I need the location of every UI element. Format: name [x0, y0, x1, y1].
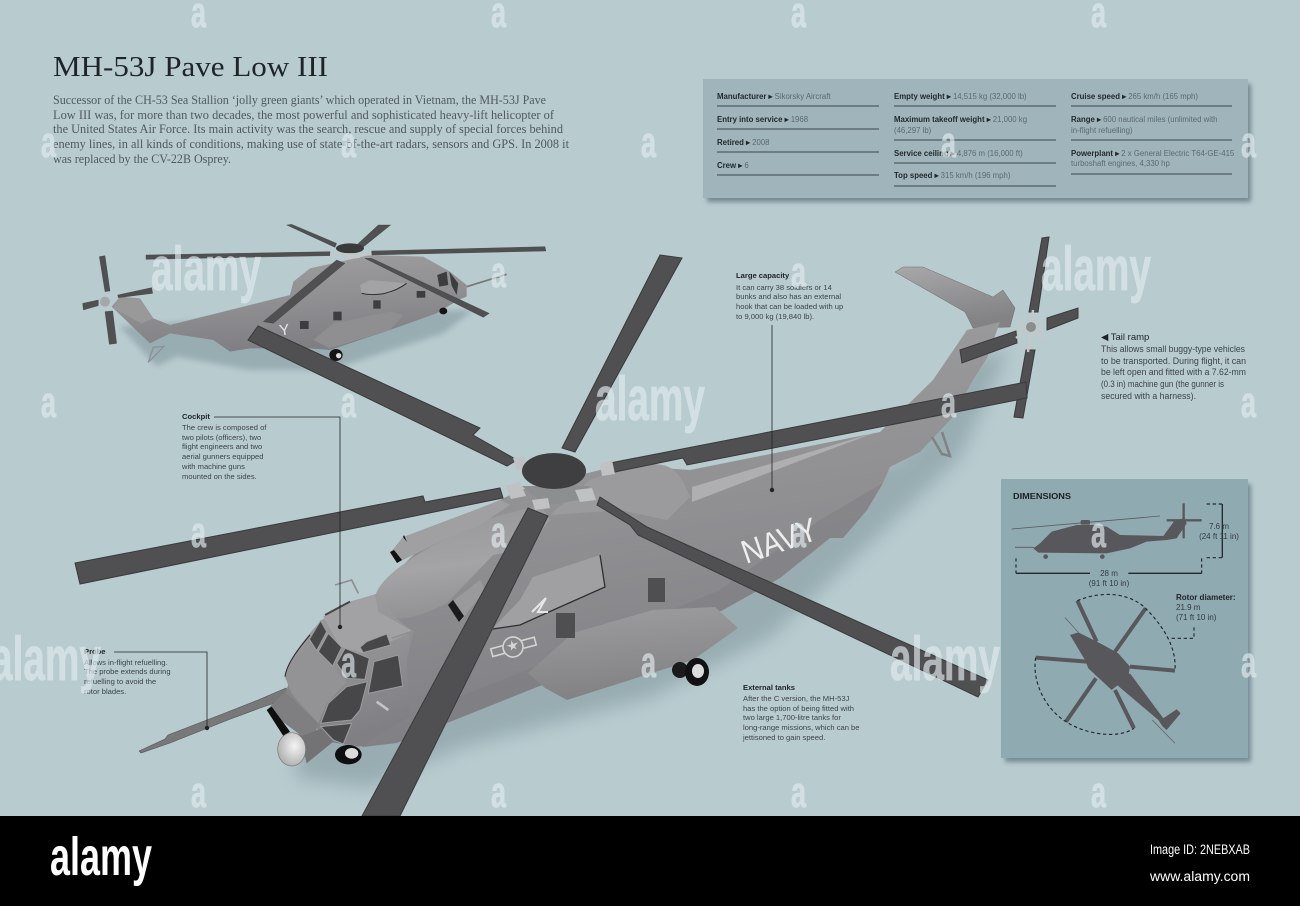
callout: cockpit: aerial gunners equipped	[182, 452, 264, 461]
callout: large capacity: to 9,000 kg (19,840 lb).	[736, 312, 814, 321]
panel: specifications: Cruise speed ▸ 265 km/h (165 mph)	[1071, 92, 1198, 101]
external tank	[528, 607, 738, 700]
callout: external tanks: After the C version, the MH-53J	[743, 694, 850, 703]
dimension labels: (24 ft 11 in)	[1199, 532, 1239, 541]
small helicopter, three-quarter rear view: Y	[278, 321, 291, 340]
callout: tail ramp	[1101, 332, 1246, 401]
panel: dimensions	[1001, 479, 1251, 762]
stock photo watermarks: a	[941, 378, 956, 427]
dimension labels: (71 ft 10 in)	[1176, 613, 1217, 622]
stock photo watermarks: a	[791, 508, 806, 557]
callout: probe: Probe	[84, 647, 106, 656]
callout: cockpit	[181, 412, 342, 629]
callout: tail ramp: secured with a harness).	[1101, 391, 1196, 401]
stock photo watermarks: a	[491, 248, 506, 297]
stock photo watermarks: alamy	[151, 235, 261, 304]
stock photo watermarks: a	[491, 768, 506, 817]
callout: cockpit: Cockpit	[182, 412, 210, 421]
callout: external tanks: External tanks	[743, 683, 795, 692]
callout: tail ramp: ◀ Tail ramp	[1101, 332, 1149, 343]
stock photo watermarks: a	[641, 118, 656, 167]
callout: large capacity: hook that can be loaded with up	[736, 302, 843, 311]
top view silhouette	[1036, 601, 1181, 743]
stock photo watermarks: a	[791, 768, 806, 817]
callout: external tanks: jettisoned to gain speed.	[742, 733, 825, 742]
air duct strip	[692, 432, 877, 502]
callout: probe: refuelling to avoid the	[84, 677, 156, 686]
panel: specifications: Entry into service ▸ 1968	[717, 115, 808, 124]
callout: external tanks: two large 1,700-litre tanks for	[743, 713, 841, 722]
rotor hub	[505, 453, 615, 510]
dimension labels: Rotor diameter:	[1176, 593, 1236, 602]
panel: specifications: Manufacturer ▸ Sikorsky Aircraft	[717, 92, 831, 101]
forward engine fairing	[375, 505, 550, 618]
callout: cockpit: The crew is composed of	[182, 423, 267, 432]
panel: specifications: Empty weight ▸ 14,515 kg (32,000 lb)	[894, 92, 1027, 101]
engine nacelle	[493, 555, 605, 629]
callout: tail ramp: to be transported. During flight, it can	[1101, 356, 1246, 366]
panel: specifications: Powerplant ▸ 2 x General Electric T64-GE-415	[1071, 149, 1235, 158]
stock photo watermarks: alamy	[890, 625, 1000, 694]
panel: specifications	[703, 79, 1251, 202]
national roundel	[489, 631, 538, 662]
bottom credit bar: Image ID: 2NEBXAB	[1150, 842, 1250, 857]
callout: external tanks: has the option of being fitted with	[743, 704, 854, 713]
fuselage windows	[556, 578, 665, 638]
panel: specifications: Top speed ▸ 315 km/h (196 mph)	[894, 171, 1011, 180]
bottom credit bar: www.alamy.com	[1149, 869, 1250, 884]
callout: external tanks: long-range missions, which can be	[743, 723, 860, 732]
side view silhouette	[1012, 503, 1202, 559]
probe	[139, 688, 290, 753]
bottom credit bar	[0, 816, 1300, 906]
stock photo watermarks: a	[491, 508, 506, 557]
rear gear	[932, 432, 950, 456]
main helicopter illustration	[75, 237, 1078, 816]
callout: external tanks	[742, 683, 860, 742]
bottom credit bar: alamy	[50, 827, 152, 887]
stock photo watermarks: a	[1091, 508, 1106, 557]
panel: dimensions: DIMENSIONS	[1013, 491, 1071, 501]
air intake tube	[390, 500, 510, 563]
main gear	[672, 658, 709, 686]
dimension labels: 7.6 m	[1209, 522, 1229, 531]
panel: specifications: Service ceiling ▸ 4,876 m (16,000 ft)	[894, 149, 1023, 158]
callout: large capacity	[736, 271, 843, 492]
callout: large capacity: bunks and also has an external	[736, 292, 841, 301]
tail rotor	[960, 237, 1078, 418]
callout: probe: Allows in-flight refuelling.	[84, 658, 168, 667]
main rotor blades	[75, 255, 1027, 816]
dimension labels: 21.9 m	[1176, 603, 1201, 612]
callout: cockpit: flight engineers and two	[182, 442, 262, 451]
stock photo watermarks: a	[341, 118, 356, 167]
callout: large capacity: Large capacity	[736, 271, 790, 280]
NAVY lettering: NAVY	[736, 510, 822, 571]
stock photo watermarks: a	[341, 378, 356, 427]
fuselage lower shade	[447, 483, 883, 723]
aft fairing	[550, 464, 690, 520]
stock photo watermarks: a	[791, 248, 806, 297]
callout: cockpit: two pilots (officers), two	[182, 433, 261, 442]
intro text block: Successor of the CH-53 Sea Stallion ‘jolly green giants’ which operated in Vietnam, the MH-53J Pave	[53, 93, 546, 107]
dimension labels: (91 ft 10 in)	[1089, 579, 1130, 588]
stock photo watermarks: a	[941, 118, 956, 167]
drop shadow under helicopter	[295, 348, 1010, 788]
callout: cockpit: mounted on the sides.	[182, 472, 257, 481]
intro text block: the United States Air Force. Its main activity was the search, rescue and supply of special forces behind	[53, 122, 564, 136]
cockpit and nose	[267, 580, 413, 766]
intake black rim	[448, 600, 464, 622]
panel: specifications: Range ▸ 600 nautical miles (unlimited with	[1071, 115, 1218, 124]
stock photo watermarks: a	[41, 118, 56, 167]
panel: specifications: Crew ▸ 6	[717, 161, 749, 170]
stock photo watermarks: a	[191, 508, 206, 557]
dimension labels: 28 m	[1100, 569, 1118, 578]
panel: specifications: in-flight refuelling)	[1071, 126, 1133, 135]
panel: specifications: Retired ▸ 2008	[717, 138, 769, 147]
callout: tail ramp: be left open and fitted with a 7.62-mm	[1101, 367, 1246, 377]
callout: large capacity: It can carry 38 soldiers or 14	[736, 283, 832, 292]
chevron marking	[532, 598, 548, 612]
panel: specifications: turboshaft engines, 4,330 hp	[1071, 159, 1170, 168]
tail fin	[895, 267, 1015, 328]
panel: specifications: Maximum takeoff weight ▸ 21,000 kg	[894, 115, 1027, 124]
stock photo watermarks: a	[1241, 378, 1256, 427]
title: MH-53J Pave Low III	[53, 52, 328, 83]
stock photo watermarks: a	[1241, 638, 1256, 687]
stock photo watermarks: a	[1241, 118, 1256, 167]
stock photo watermarks: a	[191, 768, 206, 817]
callout: probe: rotor blades.	[84, 687, 126, 696]
intro text block: Low III was, for more than two decades, the most powerful and sophisticated heavy-lift helicopter of	[53, 108, 555, 122]
callout: tail ramp: (0.3 in) machine gun (the gunner is	[1101, 379, 1225, 389]
stock photo watermarks: alamy	[1041, 235, 1151, 304]
stock photo watermarks: a	[641, 638, 656, 687]
intro text block: was replaced by the CV-22B Osprey.	[53, 152, 231, 166]
stock photo watermarks: a	[1091, 768, 1106, 817]
stock photo watermarks: a	[341, 638, 356, 687]
nacelle intake	[448, 580, 485, 622]
dimension labels	[1089, 522, 1239, 622]
callout: probe: The probe extends during	[84, 667, 171, 676]
callout: cockpit: with machine guns	[181, 462, 245, 471]
intro text block: enemy lines, in all kinds of conditions, making use of state-of-the-art radars, sensors and GPS. In 2008 it	[53, 137, 570, 151]
stock photo watermarks: alamy	[595, 365, 705, 434]
dimension lines	[1016, 504, 1222, 734]
panel: specifications: (46,297 lb)	[894, 126, 932, 135]
callout: probe	[84, 647, 209, 730]
stock photo watermarks: a	[41, 378, 56, 427]
intro text block	[53, 93, 570, 166]
small helicopter, three-quarter rear view	[83, 224, 546, 370]
fuselage	[283, 322, 1000, 747]
callout: tail ramp: This allows small buggy-type vehicles	[1101, 344, 1246, 354]
